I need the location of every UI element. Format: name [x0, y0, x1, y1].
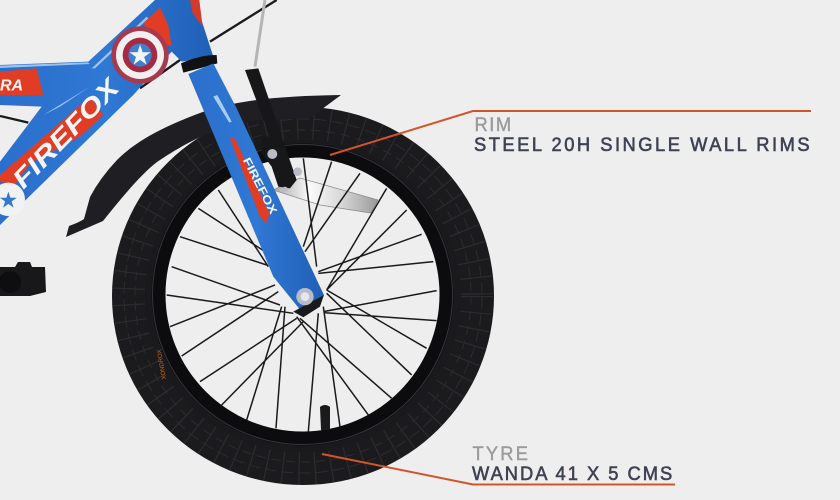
tyre brand mark: XONDROX	[157, 349, 168, 380]
shield emblem: ★	[128, 40, 152, 71]
label: RIM	[474, 115, 511, 136]
frame tubes	[0, 0, 213, 225]
tyre	[112, 107, 494, 485]
value: WANDA 41 X 5 CMS	[472, 464, 672, 485]
mudguard	[66, 95, 341, 237]
callout: tyre	[322, 444, 675, 485]
tube highlights	[0, 17, 148, 115]
leader line	[322, 454, 675, 484]
fork dropout and axle	[293, 288, 324, 317]
spokes	[167, 158, 437, 432]
leader line	[330, 111, 811, 155]
small shield	[0, 183, 25, 216]
rim	[152, 144, 452, 444]
fork decal	[230, 138, 269, 223]
cables	[0, 0, 277, 123]
FIREFOX fork lettering: FIREFOX	[240, 156, 279, 217]
callout: rim	[330, 111, 811, 156]
head tube ring	[181, 55, 217, 73]
brake assembly	[245, 0, 302, 192]
label: TYRE	[472, 444, 528, 465]
fork	[188, 63, 324, 312]
front wheel	[112, 107, 494, 485]
reflector	[273, 178, 378, 213]
pedal	[0, 262, 46, 296]
bicycle frame	[0, 0, 324, 317]
red decal	[0, 97, 103, 185]
FIREFOX frame lettering: FIREFOX	[6, 71, 126, 194]
value: STEEL 20H SINGLE WALL RIMS	[474, 135, 810, 156]
valve	[320, 405, 330, 430]
avengers decal text: RA	[0, 78, 23, 95]
shield emblem	[111, 26, 169, 84]
